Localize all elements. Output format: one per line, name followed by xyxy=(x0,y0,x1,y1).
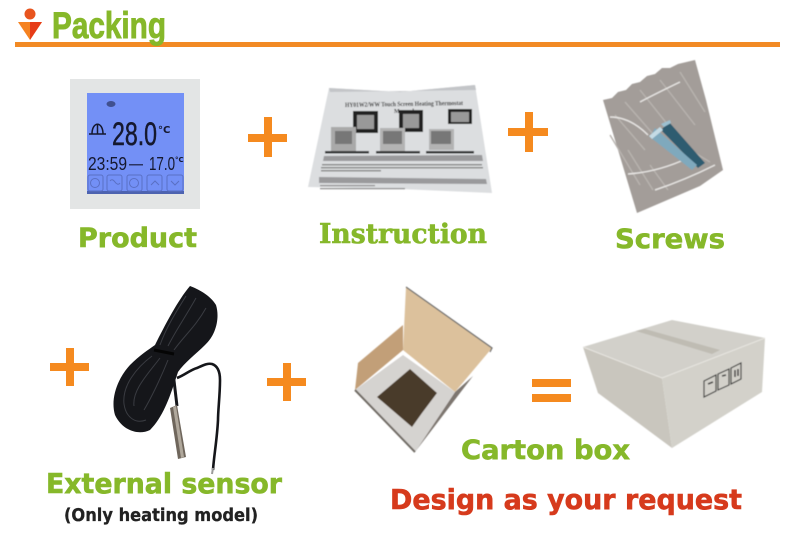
label: Product: Product xyxy=(78,223,197,254)
header rule xyxy=(15,42,780,47)
label: External sensor: External sensor xyxy=(46,467,282,500)
product: thermostat: 23:59 xyxy=(88,154,127,174)
callout: Design as your request: Design as your request xyxy=(390,483,742,516)
product: thermostat: °C xyxy=(175,156,184,164)
large carton box xyxy=(583,320,765,448)
equals sign xyxy=(532,379,571,402)
title: Packing: Packing xyxy=(52,5,166,46)
instruction sheet: HY01W2/WW Touch Screen Heating Thermostat xyxy=(345,100,464,109)
external sensor cable xyxy=(113,286,220,474)
small open carton xyxy=(355,287,492,452)
instruction sheet xyxy=(308,85,492,193)
product: thermostat: 28.0 xyxy=(112,116,157,152)
label: Screws: Screws xyxy=(615,224,725,255)
instruction sheet: Manual xyxy=(394,109,414,115)
product: thermostat: °C xyxy=(158,125,170,136)
icon: packing person marker xyxy=(18,8,42,40)
label: Carton box: Carton box xyxy=(461,435,630,466)
product: thermostat: 17.0 xyxy=(149,154,175,174)
plus 4 xyxy=(267,363,306,401)
plus 3 xyxy=(50,348,89,386)
product: thermostat xyxy=(70,79,200,209)
note: Only heating model: (Only heating model) xyxy=(64,505,258,526)
label: Instruction: Instruction xyxy=(319,219,487,250)
screws bag xyxy=(603,60,723,213)
plus 2 xyxy=(508,112,548,152)
plus 1 xyxy=(248,117,287,157)
